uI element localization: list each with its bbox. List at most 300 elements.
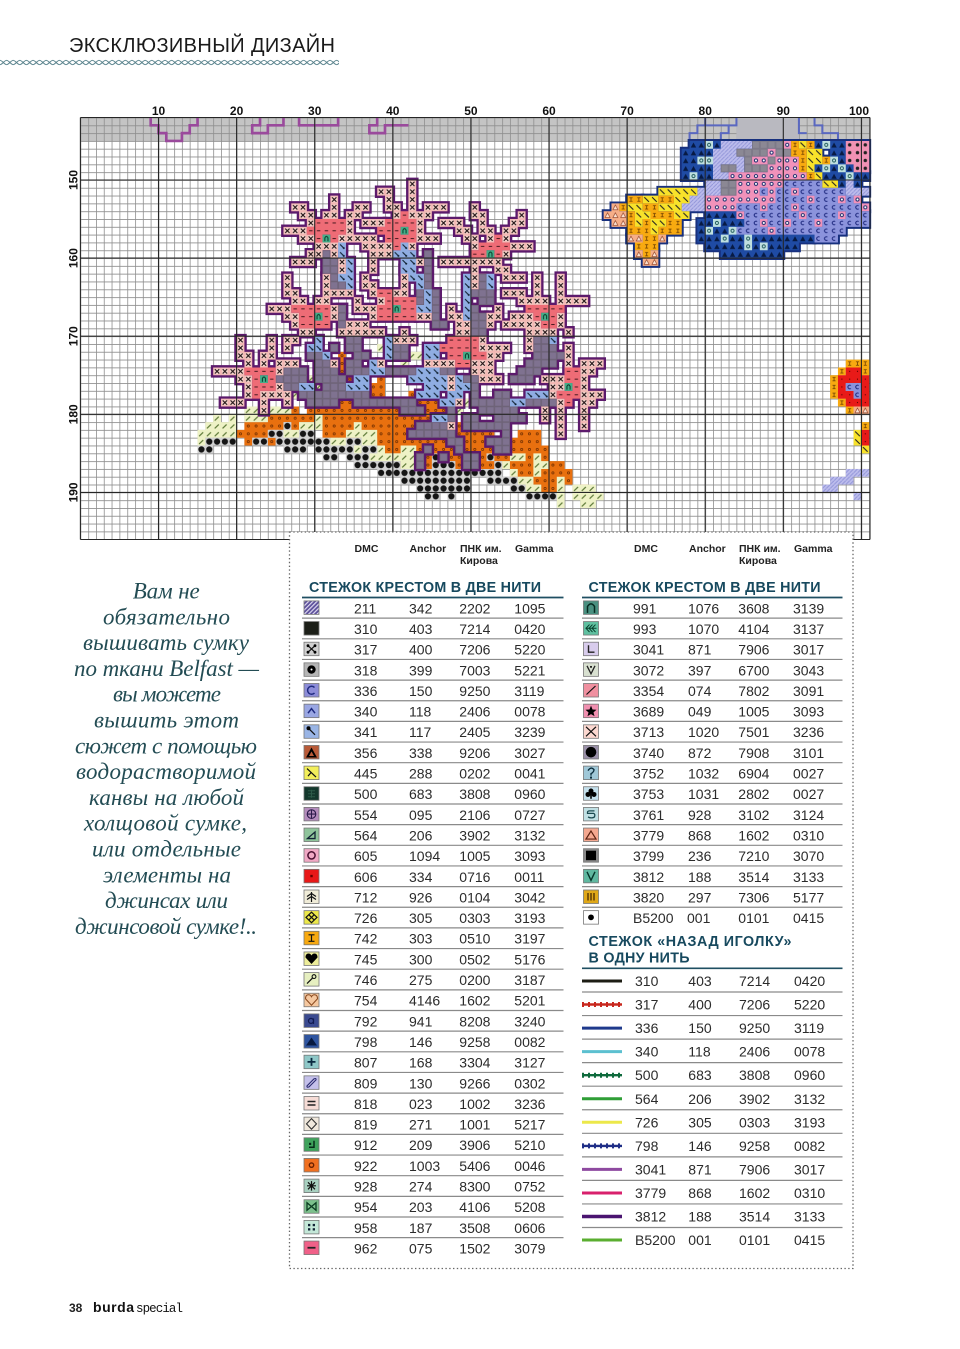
row: 317: 400 xyxy=(409,642,433,658)
row: 807: 168 xyxy=(409,1055,433,1071)
icon: line 798 xyxy=(582,1145,622,1147)
row: 211 xyxy=(304,600,546,616)
row: 310: 310 xyxy=(354,621,378,637)
row: 954: 203 xyxy=(409,1199,433,1215)
footer: page number and magazine name: 38 xyxy=(69,1301,83,1315)
row: 912: 912 xyxy=(354,1137,378,1153)
row numbers xyxy=(66,170,80,502)
title: ЭКСКЛЮЗИВНЫЙ ДИЗАЙН: ЭКСКЛЮЗИВНЫЙ ДИЗАЙН xyxy=(69,33,335,57)
row: 3812: 3133 xyxy=(794,1208,825,1224)
row: 807: 3304 xyxy=(459,1055,491,1071)
row: 712: 0104 xyxy=(459,889,491,905)
icon: 807 xyxy=(304,1055,319,1069)
row: 745: 0502 xyxy=(459,951,491,967)
row: B5200: 0101 xyxy=(738,910,770,926)
row: 962: 962 xyxy=(354,1240,378,1256)
row: 310: 310 xyxy=(635,973,659,989)
row: 954: 4106 xyxy=(459,1199,491,1215)
row: 3812: 188 xyxy=(688,869,712,885)
row: 3689: 3689 xyxy=(633,704,664,720)
row: 606: 0011 xyxy=(514,869,545,885)
text block: side note: обязательно xyxy=(103,604,230,629)
text block: side note: джинсах или xyxy=(105,888,228,913)
row: 336: 9250 xyxy=(739,1020,770,1036)
row: 3072: 3043 xyxy=(793,662,824,678)
icon: 912 xyxy=(304,1138,319,1151)
row: 318: 5221 xyxy=(514,662,546,678)
row: 3752: 1032 xyxy=(688,766,719,782)
footer: page number and magazine name xyxy=(69,1299,183,1316)
row: 356: 9206 xyxy=(459,745,491,761)
row: 3753 xyxy=(584,786,824,802)
icon: 818 xyxy=(304,1096,319,1110)
icon: 445 xyxy=(304,766,319,780)
row: 798: 798 xyxy=(635,1138,659,1154)
icon: 954 xyxy=(304,1200,319,1213)
row: 445: 288 xyxy=(409,766,433,782)
row: 958: 187 xyxy=(409,1220,433,1236)
row: 3041: 3017 xyxy=(794,1161,825,1177)
icon: 3812 xyxy=(584,869,598,883)
heavy grid lines xyxy=(80,118,870,540)
row numbers: 170 xyxy=(66,326,80,346)
row: 317: 400 xyxy=(688,996,712,1012)
column numbers: 70 xyxy=(620,104,634,118)
row numbers: 150 xyxy=(66,170,80,190)
column numbers: 20 xyxy=(230,104,244,118)
row: 605: 605 xyxy=(354,848,378,864)
row: 317: 7206 xyxy=(459,642,491,658)
icon: line 317 xyxy=(582,1003,622,1006)
row: 336: 336 xyxy=(635,1020,659,1036)
table: right cross stitch key xyxy=(584,600,824,926)
row: 807: 3127 xyxy=(514,1055,546,1071)
icon: 341 xyxy=(304,725,319,738)
icon: 3041 xyxy=(584,642,598,656)
row: B5200: 0415 xyxy=(794,1232,825,1248)
column headers right xyxy=(634,543,833,567)
row: B5200: 001 xyxy=(688,1232,712,1248)
icon: 3761 xyxy=(584,807,598,821)
row: 712: 926 xyxy=(409,889,433,905)
row: 912 xyxy=(304,1137,546,1153)
row: 742: 742 xyxy=(354,931,378,947)
row: 605 xyxy=(304,848,546,864)
row: 819: 1001 xyxy=(459,1117,491,1133)
row: 726: 305 xyxy=(409,910,433,926)
icon: 3740 xyxy=(584,745,598,759)
row: 564: 3132 xyxy=(794,1091,825,1107)
row: 922: 1003 xyxy=(409,1158,440,1174)
column headers right: Gamma xyxy=(794,543,833,555)
icon: 928 xyxy=(304,1179,319,1193)
stitched motifs xyxy=(151,118,869,508)
row numbers: 180 xyxy=(66,404,80,424)
row: 819: 819 xyxy=(354,1117,378,1133)
row: 922: 5406 xyxy=(459,1158,491,1174)
row: 3779: 3779 xyxy=(633,827,664,843)
row: 3713: 3236 xyxy=(793,724,824,740)
row: 554 xyxy=(304,807,546,823)
row: 798 xyxy=(582,1138,825,1154)
row: 317: 7206 xyxy=(739,996,770,1012)
row: 754: 754 xyxy=(354,993,378,1009)
row: 356: 3027 xyxy=(514,745,546,761)
row: 3753: 2802 xyxy=(738,786,770,802)
row: 3761 xyxy=(584,807,824,823)
row: 754: 1602 xyxy=(459,993,491,1009)
row: 605: 1094 xyxy=(409,848,440,864)
row: 3812 xyxy=(584,869,824,885)
row: 792: 792 xyxy=(354,1013,378,1029)
row: 991: 3139 xyxy=(793,600,824,616)
row: 340: 2406 xyxy=(739,1044,770,1060)
row: 3779 xyxy=(584,827,824,843)
row: 818: 023 xyxy=(409,1096,433,1112)
shaded band of overlap rows xyxy=(80,118,870,142)
row: 818 xyxy=(304,1096,546,1112)
row: 500: 683 xyxy=(409,786,433,802)
row: 991: 991 xyxy=(633,600,657,616)
icon: 3354 xyxy=(584,684,598,697)
row: 746: 275 xyxy=(409,972,433,988)
row: 3779: 1602 xyxy=(738,827,770,843)
row: 564: 564 xyxy=(354,827,378,843)
row: 742 xyxy=(304,931,546,947)
row: 500 xyxy=(582,1067,825,1083)
text block: side note: или отдельные xyxy=(92,836,241,862)
row: 554: 0727 xyxy=(514,807,546,823)
icon: 3713 xyxy=(584,725,598,738)
icon: line 726 xyxy=(582,1121,622,1124)
row: 745: 300 xyxy=(409,951,433,967)
row: 318: 399 xyxy=(409,662,433,678)
row: 318 xyxy=(304,662,546,678)
row: 445 xyxy=(304,766,546,782)
row: 958: 3508 xyxy=(459,1220,491,1236)
row: 818: 3236 xyxy=(514,1096,546,1112)
row: 792 xyxy=(304,1013,546,1029)
row: 3041: 3041 xyxy=(635,1161,666,1177)
row: 211: 1095 xyxy=(514,600,546,616)
row: 340: 0078 xyxy=(794,1044,825,1060)
row: 336: 9250 xyxy=(459,683,491,699)
heading: right cross stitch: СТЕЖОК КРЕСТОМ В ДВЕ НИТИ xyxy=(588,580,820,596)
row: 726: 3193 xyxy=(514,910,546,926)
row: 500: 683 xyxy=(688,1067,712,1083)
chart: cross-stitch pattern grid xyxy=(66,104,870,540)
row: 3761: 3124 xyxy=(793,807,824,823)
row: 754: 5201 xyxy=(514,993,546,1009)
row: 554: 2106 xyxy=(459,807,491,823)
table: back stitch key xyxy=(582,973,825,1248)
row: B5200: B5200 xyxy=(635,1232,676,1248)
icon: line 336 xyxy=(582,1027,622,1030)
motif: coral branches and stars xyxy=(213,180,604,469)
row: 712: 712 xyxy=(354,889,378,905)
row: 356 xyxy=(304,745,546,761)
icon: 3820 xyxy=(584,890,598,904)
row: 928 xyxy=(304,1178,546,1194)
text block: side note xyxy=(74,578,260,939)
row: 726: 726 xyxy=(635,1114,659,1130)
row: 818: 818 xyxy=(354,1096,378,1112)
row: 3812: 3514 xyxy=(738,869,770,885)
row: 746: 3187 xyxy=(514,972,546,988)
row: 3072: 397 xyxy=(688,662,712,678)
row: 341 xyxy=(304,724,546,740)
column headers right: Кирова xyxy=(739,555,777,567)
row: 3753: 1031 xyxy=(688,786,719,802)
row: 928: 928 xyxy=(354,1178,378,1194)
heading: left cross stitch: СТЕЖОК КРЕСТОМ В ДВЕ НИТИ xyxy=(309,580,541,596)
icon: 554 xyxy=(304,807,319,821)
row: 798 xyxy=(304,1034,546,1050)
row: 3752: 6904 xyxy=(738,766,770,782)
row numbers: 190 xyxy=(66,482,80,502)
icon: line 3041 xyxy=(582,1168,622,1171)
column numbers: 50 xyxy=(464,104,478,118)
row: 318: 318 xyxy=(354,662,378,678)
row: 500: 0960 xyxy=(514,786,546,802)
row: 991: 1076 xyxy=(688,600,719,616)
row: 726: 3193 xyxy=(794,1114,825,1130)
row: 3041: 3041 xyxy=(633,642,664,658)
text block: side note: по ткани Belfast — xyxy=(74,656,260,681)
icon: line 3812 xyxy=(582,1215,622,1218)
row: 3820: 297 xyxy=(688,889,712,905)
row: 962: 3079 xyxy=(514,1240,546,1256)
row: 3779: 1602 xyxy=(739,1185,770,1201)
row: 922: 0046 xyxy=(514,1158,546,1174)
row: 3354: 7802 xyxy=(738,683,770,699)
icon: 958 xyxy=(304,1220,319,1234)
row: 3689 xyxy=(584,704,824,720)
row: 3812 xyxy=(582,1208,825,1224)
row: 928: 274 xyxy=(409,1178,433,1194)
row: 356: 338 xyxy=(409,745,433,761)
column headers left: DMC xyxy=(354,543,379,555)
row: 500: 3808 xyxy=(739,1067,770,1083)
row: 3689: 3093 xyxy=(793,704,824,720)
row: 317 xyxy=(582,996,825,1012)
row: 726 xyxy=(582,1114,825,1130)
icon: 317 xyxy=(304,642,319,656)
icon: 3753 xyxy=(584,787,598,800)
heading: back stitch xyxy=(588,934,792,966)
column numbers: 10 xyxy=(152,104,165,118)
row: 564 xyxy=(304,827,546,843)
row: 3072: 6700 xyxy=(738,662,770,678)
row: 712 xyxy=(304,889,546,905)
row: 340 xyxy=(304,704,546,720)
row: 746: 746 xyxy=(354,972,378,988)
text block: side note: вышивать сумку xyxy=(83,630,250,655)
row: 993: 4104 xyxy=(738,621,770,637)
row: 3812: 3514 xyxy=(739,1208,770,1224)
row: 3752: 0027 xyxy=(793,766,824,782)
row: 340: 2406 xyxy=(459,704,491,720)
row: 606 xyxy=(304,869,545,885)
row: 792: 8208 xyxy=(459,1013,491,1029)
row: 564: 206 xyxy=(409,827,433,843)
row: 3740: 872 xyxy=(688,745,712,761)
row: 310: 0420 xyxy=(794,973,825,989)
row: 746: 0200 xyxy=(459,972,491,988)
column headers right: ПНК им. xyxy=(739,543,781,555)
row: 564: 564 xyxy=(635,1091,659,1107)
row: 3812: 3812 xyxy=(633,869,664,885)
row: 809: 809 xyxy=(354,1075,378,1091)
row: 726: 305 xyxy=(688,1114,712,1130)
icon: line 340 xyxy=(582,1050,622,1053)
row: 3812: 3133 xyxy=(793,869,824,885)
heading: back stitch: СТЕЖОК «НАЗАД ИГОЛКУ» xyxy=(588,934,792,950)
row: 819: 5217 xyxy=(514,1117,546,1133)
row: 3820: 7306 xyxy=(738,889,770,905)
row: 745: 5176 xyxy=(514,951,546,967)
row: 211: 2202 xyxy=(459,600,491,616)
icon: line 564 xyxy=(582,1097,622,1100)
row: 3812: 3812 xyxy=(635,1208,666,1224)
icon: 336 xyxy=(304,684,319,697)
icon: 564 xyxy=(304,828,319,842)
row: 726: 0303 xyxy=(739,1114,770,1130)
row: 336: 150 xyxy=(688,1020,712,1036)
icon: 340 xyxy=(304,704,319,718)
row: 754 xyxy=(304,993,546,1009)
row: 954: 5208 xyxy=(514,1199,546,1215)
icon: 746 xyxy=(304,973,319,986)
heading: back stitch: В ОДНУ НИТЬ xyxy=(588,950,690,966)
row: 3041: 871 xyxy=(688,1161,712,1177)
text block: side note: джинсовой сумке!.. xyxy=(75,914,257,939)
row: 745 xyxy=(304,951,546,967)
row: 3041: 7906 xyxy=(738,642,770,658)
row: 3820: 5177 xyxy=(793,889,824,905)
row: 336: 3119 xyxy=(794,1020,824,1036)
row: 3799: 7210 xyxy=(738,848,770,864)
row: 340: 0078 xyxy=(514,704,546,720)
row: 605: 1005 xyxy=(459,848,491,864)
row: 317: 5220 xyxy=(514,642,546,658)
row: 317: 317 xyxy=(635,996,659,1012)
row: 798: 798 xyxy=(354,1034,378,1050)
row: 958 xyxy=(304,1220,546,1236)
icon: line 500 xyxy=(582,1074,622,1076)
icon: 991 xyxy=(584,601,598,614)
icon: 606 xyxy=(304,869,319,883)
row: 726 xyxy=(304,910,546,926)
row: 3072 xyxy=(584,662,824,678)
row: 310: 403 xyxy=(688,973,712,989)
row: 3752: 3752 xyxy=(633,766,664,782)
icon: 745 xyxy=(304,952,319,965)
row: 310: 7214 xyxy=(459,621,491,637)
row: 798: 0082 xyxy=(514,1034,546,1050)
row: 792: 941 xyxy=(409,1013,433,1029)
row: 928: 0752 xyxy=(514,1178,546,1194)
row: 962: 075 xyxy=(409,1240,433,1256)
row: 3354: 074 xyxy=(688,683,712,699)
row: 962: 1502 xyxy=(459,1240,491,1256)
row: 3779: 868 xyxy=(688,827,712,843)
icon: 726 xyxy=(304,911,319,924)
row: 809 xyxy=(304,1075,546,1091)
row: 912: 209 xyxy=(409,1137,433,1153)
column headers left: Кирова xyxy=(460,555,498,567)
row: 792: 3240 xyxy=(514,1013,546,1029)
row: 500: 500 xyxy=(635,1067,659,1083)
row: 3354: 3354 xyxy=(633,683,664,699)
row: B5200: B5200 xyxy=(633,910,674,926)
icon: 3752 xyxy=(584,766,598,780)
row: 954 xyxy=(304,1199,546,1215)
icon: 754 xyxy=(304,993,319,1007)
row: 606: 334 xyxy=(409,869,433,885)
row: 3761: 928 xyxy=(688,807,712,823)
icon: 798 xyxy=(304,1035,319,1048)
row: 3689: 1005 xyxy=(738,704,770,720)
row: 958: 0606 xyxy=(514,1220,546,1236)
row: 310: 0420 xyxy=(514,621,546,637)
row: 991 xyxy=(584,600,824,616)
text block: side note: элементы на xyxy=(103,862,231,887)
column headers left: ПНК им. xyxy=(460,543,502,555)
row: 993 xyxy=(584,621,824,637)
row: 341: 2405 xyxy=(459,724,491,740)
row: 356: 356 xyxy=(354,745,378,761)
row: 310 xyxy=(582,973,825,989)
row: 962 xyxy=(304,1240,546,1256)
row: 3740: 3740 xyxy=(633,745,664,761)
row: 564 xyxy=(582,1091,825,1107)
row: 3779: 0310 xyxy=(794,1185,825,1201)
row: 809: 130 xyxy=(409,1075,433,1091)
icon: 809 xyxy=(304,1076,319,1089)
motif: fish xyxy=(604,118,869,266)
text block: side note: вы можете xyxy=(113,682,221,707)
column numbers: 60 xyxy=(542,104,556,118)
row: 310 xyxy=(304,621,546,637)
text block: side note: вышить этот xyxy=(94,708,239,732)
row: 3041: 3017 xyxy=(793,642,824,658)
column numbers: 80 xyxy=(699,104,712,118)
row: 336 xyxy=(304,683,545,699)
row: 726: 0303 xyxy=(459,910,491,926)
row: 746 xyxy=(304,972,546,988)
column headers left: Gamma xyxy=(515,543,554,555)
icon: 792 xyxy=(304,1014,319,1027)
row: 500: 0960 xyxy=(794,1067,825,1083)
icon: 318 xyxy=(304,663,319,676)
icon: 962 xyxy=(304,1241,319,1255)
decorative chain line xyxy=(0,60,339,66)
row: 809: 0302 xyxy=(514,1075,546,1091)
row: 3799: 236 xyxy=(688,848,712,864)
row: 819: 271 xyxy=(409,1117,433,1133)
row: 340: 118 xyxy=(409,704,432,720)
motif: fragments of stitched shapes in the shaded band xyxy=(151,118,408,141)
row: 993: 993 xyxy=(633,621,657,637)
icon: 712 xyxy=(304,890,319,904)
row: 3752 xyxy=(584,766,824,782)
icon: 211 xyxy=(304,601,319,614)
row: 3779: 868 xyxy=(688,1185,712,1201)
row: 993: 3137 xyxy=(793,621,824,637)
row: 991: 3608 xyxy=(738,600,770,616)
row: 340: 118 xyxy=(688,1044,711,1060)
